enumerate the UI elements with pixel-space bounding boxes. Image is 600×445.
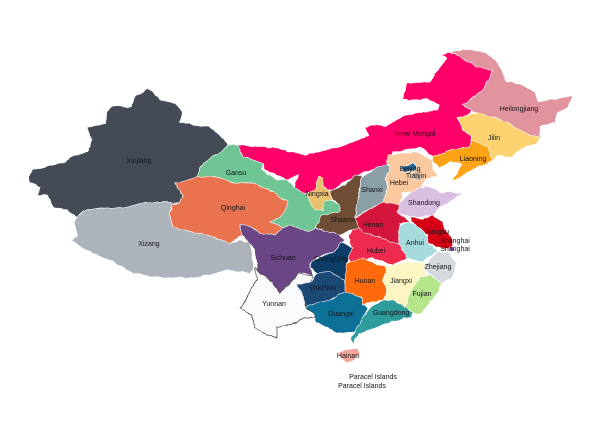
region: Guizhou (297, 272, 345, 307)
region: Hubei (345, 228, 407, 265)
region: Shanxi (355, 165, 390, 217)
region: Liaoning (433, 140, 493, 180)
label: Tianjin: Tianjin (406, 173, 426, 180)
region: Xizang (72, 202, 253, 278)
region: Jiangsu (410, 215, 453, 248)
region: Qinghai (169, 176, 287, 243)
label: Hainan: Hainan (337, 353, 359, 360)
region: Guangdong (350, 300, 413, 345)
region: Ningxia (307, 177, 332, 210)
region: Shandong (397, 187, 463, 218)
label: Sichuan: Sichuan (270, 255, 296, 262)
label: Shanghai: Shanghai (440, 238, 470, 245)
region: Zhejiang (423, 251, 457, 283)
label: Inner Mongol: Inner Mongol (395, 131, 436, 138)
label: Anhui: Anhui (406, 240, 424, 247)
region: Gansu (198, 145, 340, 232)
label: Jiangsu: Jiangsu (425, 229, 449, 236)
label: Jiangxi: Jiangxi (390, 278, 412, 285)
region: Shanghai (449, 246, 455, 252)
label: Fujian: Fujian (412, 291, 432, 298)
region: Jiangxi (383, 262, 428, 307)
region: Yunnan (240, 268, 315, 338)
label: Heilongjiang: Heilongjiang (500, 106, 538, 113)
region: Hebei (383, 152, 438, 205)
region: Chongqing (310, 242, 353, 280)
label: Zhejiang: Zhejiang (425, 264, 452, 271)
region: Beijing (402, 162, 417, 173)
region: Guangxi (305, 292, 368, 333)
label: Shandong: Shandong (408, 200, 440, 207)
label: Guangxi: Guangxi (328, 311, 354, 318)
region: Sichuan (240, 225, 345, 293)
label: Xizang: Xizang (138, 241, 160, 248)
label: Xinjiang: Xinjiang (127, 158, 152, 165)
label: Hunan: Hunan (355, 278, 375, 285)
label: Henan: Henan (363, 222, 383, 229)
label: Beijing: Beijing (399, 166, 421, 173)
province labels (127, 106, 538, 390)
label: Gansu: Gansu (226, 170, 246, 177)
region: Inner Mongol (238, 52, 493, 193)
province shapes (28, 49, 572, 363)
label: Hebei: Hebei (390, 180, 409, 187)
label: Chongqing: Chongqing (314, 256, 348, 263)
label: Paracel Islands: Paracel Islands (338, 383, 386, 390)
label: Qinghai: Qinghai (221, 205, 246, 212)
region: Hainan (338, 348, 360, 363)
label: Jilin: Jilin (488, 135, 500, 142)
label: Ningxia: Ningxia (305, 191, 329, 198)
region: Tianjin (412, 172, 421, 181)
region: Fujian (405, 275, 442, 313)
region: Shaanxi (315, 175, 362, 235)
label: Guangdong: Guangdong (373, 310, 409, 317)
label: Paracel Islands: Paracel Islands (349, 374, 397, 381)
region: Henan (355, 202, 410, 245)
region: Heilongjiang (450, 49, 572, 137)
region: Anhui (398, 222, 437, 262)
region: Xinjiang (28, 89, 228, 218)
label: Yunnan: Yunnan (262, 301, 286, 308)
label: Guizhou: Guizhou (310, 285, 336, 292)
label: Shaanxi: Shaanxi (330, 217, 356, 224)
region: Hunan (343, 258, 387, 305)
label: Shanghai: Shanghai (440, 246, 470, 253)
label: Shanxi: Shanxi (361, 187, 383, 194)
region: Jilin (457, 113, 540, 160)
label: Liaoning: Liaoning (460, 156, 486, 163)
label: Hubei: Hubei (367, 248, 386, 255)
